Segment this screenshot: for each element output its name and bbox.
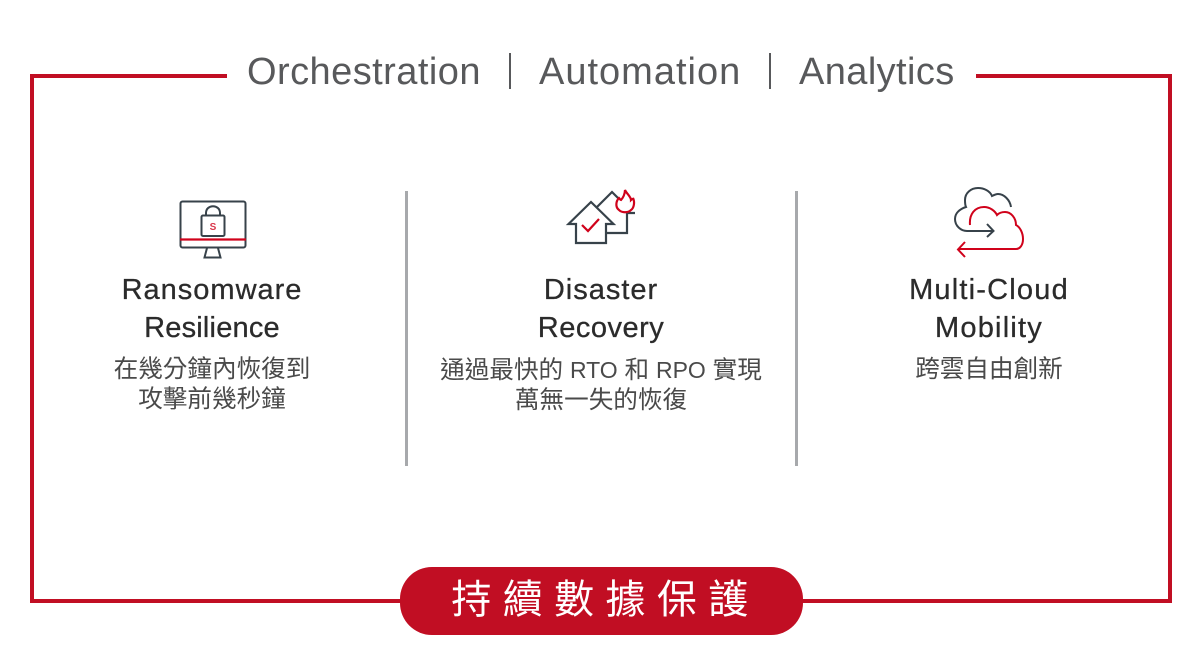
column separator 1 — [405, 191, 408, 466]
title: Disaster Recovery: Recovery — [538, 312, 664, 344]
column separator 2 — [795, 191, 798, 466]
heading divider 1 — [508, 53, 511, 89]
icon: houses with flame — [566, 190, 636, 244]
heading: Automation: Automation — [539, 51, 741, 93]
description: disaster recovery — [440, 357, 762, 414]
description: multi-cloud: 跨雲自由創新 — [915, 356, 1063, 383]
title: Disaster Recovery: Disaster — [544, 274, 658, 306]
description: ransomware: 在幾分鐘內恢復到 — [114, 356, 310, 383]
heading: Analytics: Analytics — [799, 51, 955, 93]
icon: monitor with lock: S — [210, 222, 217, 233]
description: ransomware: 攻擊前幾秒鐘 — [138, 386, 286, 413]
title: Multi-Cloud Mobility — [909, 274, 1069, 344]
title: Ransomware Resilience: Resilience — [144, 312, 280, 344]
title: Multi-Cloud Mobility: Mobility — [935, 312, 1043, 344]
description: disaster recovery: 通過最快的 RTO 和 RPO 實現 — [440, 357, 762, 384]
banner: continuous data protection — [400, 567, 803, 635]
title: Multi-Cloud Mobility: Multi-Cloud — [909, 274, 1069, 306]
description: ransomware — [114, 356, 310, 413]
icon: monitor with lock — [180, 200, 246, 258]
heading divider 2 — [768, 53, 771, 89]
description: disaster recovery: 萬無一失的恢復 — [515, 387, 687, 414]
banner: continuous data protection: 持續數據保護 — [451, 578, 760, 622]
icon: clouds with arrows — [954, 187, 1024, 258]
title: Ransomware Resilience — [122, 274, 302, 344]
title: Ransomware Resilience: Ransomware — [122, 274, 302, 306]
heading: Orchestration: Orchestration — [247, 51, 481, 93]
title: Disaster Recovery — [538, 274, 664, 344]
